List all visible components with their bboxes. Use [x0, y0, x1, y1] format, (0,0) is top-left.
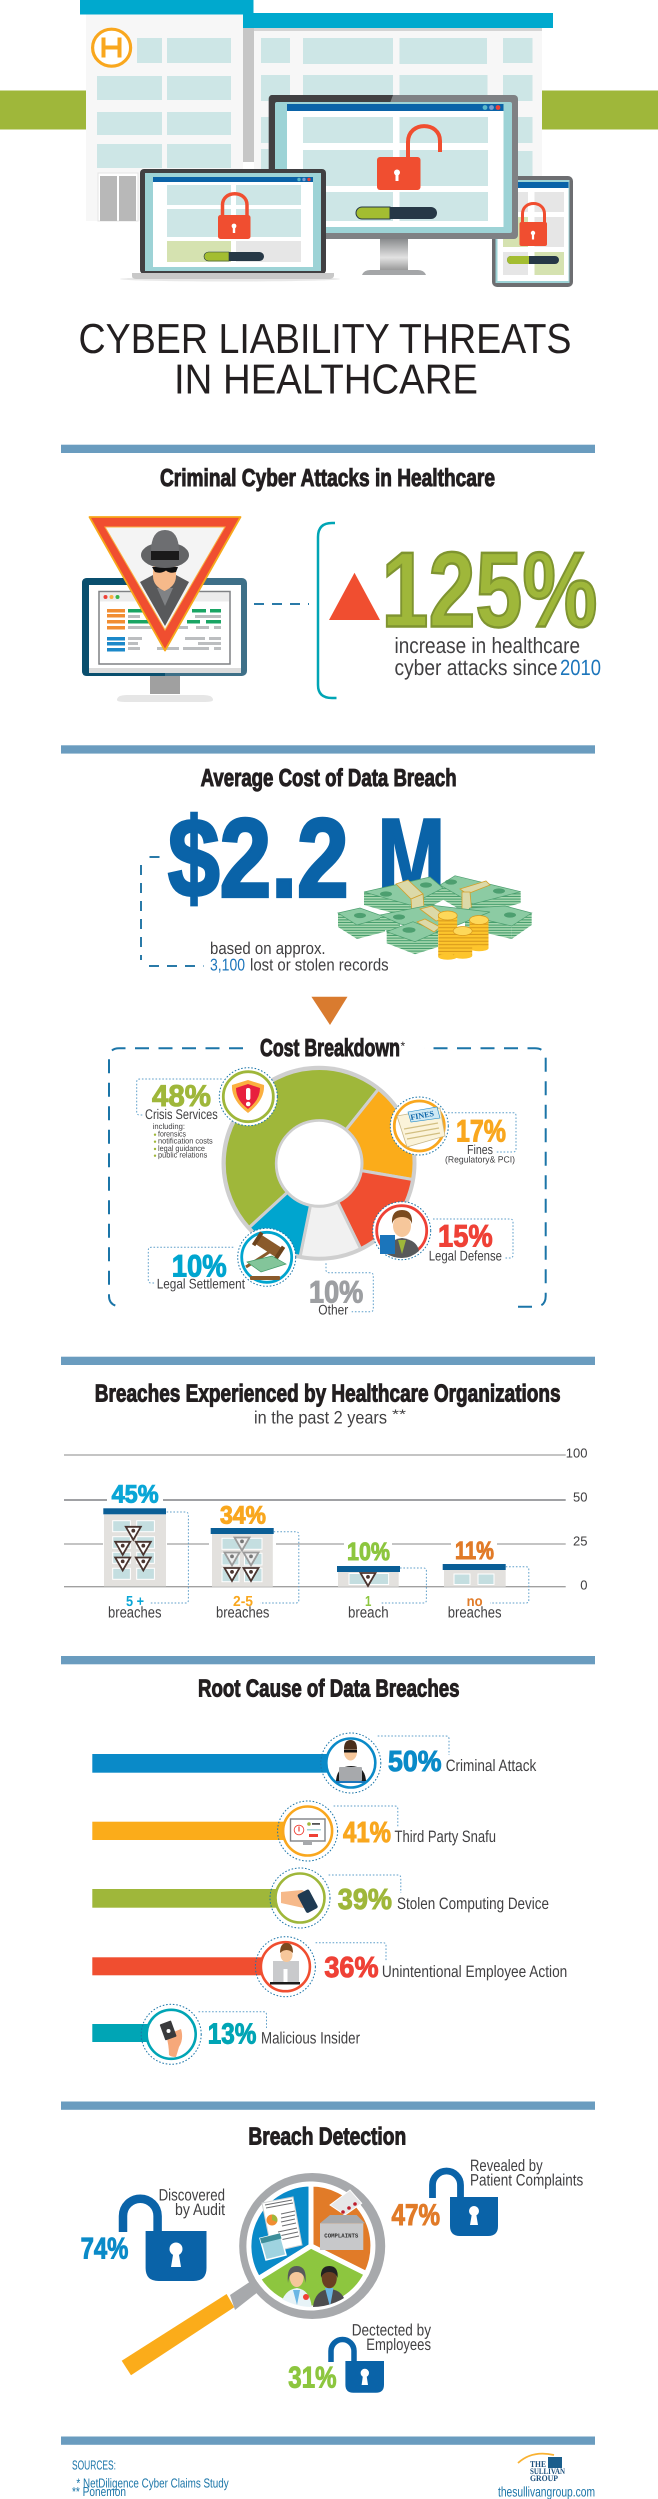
- panel: breaches experienced: [64, 1381, 588, 1621]
- row: criminal attack: [92, 1733, 537, 1793]
- icon: open padlock large: [377, 126, 440, 190]
- dashed bracket: [141, 857, 204, 966]
- caption: 3,100: [210, 956, 245, 975]
- logo: the sullivan group: GROUP: [530, 2473, 558, 2483]
- panel: cost breakdown: [109, 1035, 546, 1317]
- axis labels: 0: [580, 1578, 588, 1592]
- description: cyber attacks since: [394, 655, 558, 680]
- lock: detected by employees: Dectected by: [352, 2322, 432, 2340]
- back left stack: [364, 877, 443, 918]
- callout: other: [309, 1263, 373, 1317]
- callout: crisis services: including:: [153, 1122, 185, 1131]
- bar: 5+ breaches: 5 +: [126, 1594, 144, 1610]
- icon: hacker on monitor: [82, 517, 247, 702]
- callout: legal settlement: 10%: [172, 1249, 227, 1284]
- callout: fines: [390, 1097, 516, 1165]
- bracket: [318, 523, 336, 698]
- callout: crisis services: legal guidance: [158, 1144, 205, 1153]
- section rule: [61, 1357, 595, 1365]
- progress bar: [356, 207, 437, 219]
- heading: Average Cost of Data Breach: [201, 765, 457, 792]
- section rule: [61, 2436, 595, 2445]
- bar chart: [64, 1446, 588, 1621]
- lock: discovered by audit: by Audit: [175, 2201, 225, 2219]
- caption: based on approx.: [210, 939, 326, 958]
- hospital building: [80, 0, 553, 221]
- bar: 1 breach: 1: [365, 1594, 371, 1610]
- bar: 5+ breaches: 45%: [112, 1481, 159, 1509]
- lock: discovered by audit: [81, 2187, 225, 2281]
- logo: the sullivan group: SULLIVAN: [530, 2466, 566, 2476]
- heading: Criminal Cyber Attacks in Healthcare: [160, 465, 495, 492]
- heading: Root Cause of Data Breaches: [198, 1676, 460, 1703]
- left lower stack: [338, 908, 385, 939]
- callout: crisis services: [137, 1068, 277, 1160]
- icon: employee at laptop: [270, 1943, 300, 1984]
- row: criminal attack: 50%: [388, 1746, 442, 1778]
- callout: other: Other: [318, 1301, 349, 1317]
- section rule: [61, 1656, 595, 1664]
- green band left: [0, 90, 86, 130]
- dashed frame: [109, 1048, 546, 1307]
- callout: crisis services: Crisis Services: [145, 1106, 218, 1122]
- caption: lost or stolen records: [250, 956, 389, 975]
- subheading: in the past 2 years: [254, 1407, 387, 1427]
- bar: 2-5 breaches: 2-5: [233, 1594, 253, 1610]
- panel: breach detection: [81, 2123, 583, 2394]
- lock: patient complaints: Revealed by: [470, 2157, 543, 2175]
- lock: patient complaints: 47%: [392, 2199, 440, 2232]
- middle stack: [380, 905, 490, 936]
- bar: no breaches: 11%: [455, 1537, 494, 1565]
- icon: hacker at laptop: [336, 1740, 366, 1783]
- callout: legal defense: Legal Defense: [429, 1248, 502, 1264]
- callout: fines: (Regulatory& PCI): [445, 1155, 515, 1165]
- title: [78, 315, 572, 402]
- laptop: [120, 169, 340, 282]
- icon: hand with device: [281, 1889, 318, 1914]
- icon: closed padlock: [218, 194, 250, 239]
- callout: other: 10%: [309, 1274, 363, 1309]
- audit report: [260, 2197, 302, 2260]
- callout: fines: 17%: [456, 1114, 506, 1149]
- right lower stack: [465, 906, 532, 939]
- stat: $2.2 M: $2.2: [168, 796, 349, 920]
- employees: [282, 2266, 344, 2307]
- description: increase in healthcare: [394, 633, 580, 658]
- callout: crisis services: 48%: [152, 1080, 211, 1113]
- row: third party snafu: 41%: [343, 1817, 391, 1849]
- description: [394, 633, 601, 680]
- panel: average cost of data breach: [141, 765, 532, 1025]
- bar: 5+ breaches: [103, 1481, 188, 1621]
- callout: fines: Fines: [467, 1142, 493, 1157]
- row: malicious insider: 13%: [208, 2018, 257, 2050]
- row: unintentional employee action: Unintentional Employee Action: [382, 1963, 567, 1981]
- sources: SOURCES:: [72, 2457, 116, 2472]
- axis labels: 25: [573, 1534, 588, 1548]
- panel: root cause of data breaches: [92, 1676, 567, 2064]
- gridlines: [64, 1455, 566, 1587]
- row: unintentional employee action: [92, 1937, 567, 1997]
- bar: no breaches: [443, 1537, 529, 1621]
- dashed connector: [254, 603, 309, 605]
- axis labels: 100: [566, 1446, 588, 1460]
- progress bar: [204, 252, 264, 261]
- callout: crisis services: notification costs: [158, 1137, 213, 1146]
- donut chart: [222, 1066, 416, 1261]
- callout: crisis services: forensics: [158, 1130, 186, 1139]
- logo: the sullivan group: THE: [530, 2459, 546, 2469]
- sources: * NetDiligence Cyber Claims Study: [76, 2475, 229, 2490]
- callout: legal defense: [373, 1202, 513, 1264]
- axis labels: 50: [573, 1490, 588, 1504]
- lock: detected by employees: 31%: [288, 2361, 336, 2394]
- logo: the sullivan group: [518, 2454, 566, 2483]
- row: stolen computing device: [92, 1868, 549, 1928]
- bar: 1 breach: [337, 1538, 426, 1621]
- caption: [210, 939, 389, 975]
- lock: patient complaints: [392, 2157, 583, 2236]
- row: malicious insider: Malicious Insider: [261, 2029, 360, 2047]
- callout: legal settlement: Legal Settlement: [157, 1275, 245, 1291]
- row: unintentional employee action: 36%: [324, 1952, 379, 1984]
- heading: *: [400, 1039, 406, 1053]
- hero illustration: [0, 0, 658, 287]
- arrow: down triangle: [311, 997, 348, 1025]
- lock: detected by employees: [288, 2322, 432, 2394]
- lock: discovered by audit: 74%: [81, 2232, 128, 2265]
- coin stacks: [438, 911, 488, 960]
- icon: alert monitor: [290, 1819, 325, 1845]
- subheading: **: [392, 1406, 406, 1422]
- icon: magnifying glass: [122, 2173, 385, 2375]
- desktop monitor: [268, 95, 518, 275]
- lock: discovered by audit: Discovered: [159, 2187, 225, 2205]
- icon: hospital H sign: [93, 29, 131, 66]
- row: stolen computing device: 39%: [338, 1884, 392, 1916]
- front stack: [387, 919, 440, 954]
- section rule: [61, 2102, 595, 2110]
- bar: no breaches: breaches: [448, 1604, 502, 1621]
- green band right: [542, 90, 658, 130]
- section rule: [61, 745, 595, 754]
- complaints box: COMPLAINTS: [324, 2233, 359, 2240]
- tablet: [492, 176, 573, 287]
- description: 2010: [560, 655, 601, 680]
- callout: fines: FINES: [410, 1109, 435, 1122]
- section rule: [61, 445, 595, 453]
- complaints box: [320, 2190, 365, 2250]
- callout: legal defense: 15%: [438, 1219, 493, 1254]
- title: IN HEALTHCARE: [174, 356, 478, 402]
- row: third party snafu: [92, 1801, 496, 1861]
- icon: up triangle: [329, 573, 380, 620]
- bar: no breaches: no: [467, 1594, 483, 1610]
- sources: ** Ponemon: [72, 2484, 126, 2499]
- callout: legal settlement: [148, 1228, 296, 1291]
- back right stack: [440, 876, 521, 917]
- bar: 1 breach: 10%: [347, 1538, 390, 1566]
- lock: detected by employees: Employees: [366, 2336, 431, 2354]
- heading: Breach Detection: [248, 2123, 406, 2150]
- warning triangle: [90, 517, 240, 650]
- axis labels: [566, 1446, 588, 1592]
- sources: [72, 2457, 229, 2499]
- row: malicious insider: [92, 2004, 360, 2064]
- panel: criminal cyber attacks: [82, 465, 601, 702]
- stat: $2.2 M: M: [378, 796, 445, 920]
- bar: 5+ breaches: breaches: [108, 1604, 162, 1621]
- bar: 2-5 breaches: 34%: [220, 1501, 266, 1529]
- row: criminal attack: Criminal Attack: [446, 1757, 537, 1775]
- row: third party snafu: Third Party Snafu: [394, 1828, 496, 1846]
- bar: 2-5 breaches: breaches: [216, 1604, 270, 1621]
- icon: hand with usb drive: [160, 2020, 182, 2057]
- bar: 1 breach: breach: [348, 1604, 389, 1621]
- stat: 125%: 125%: [382, 530, 598, 650]
- icon: tablet padlock: [520, 204, 547, 246]
- title: CYBER LIABILITY THREATS: [78, 315, 572, 362]
- hacker figure: [140, 530, 189, 626]
- row: stolen computing device: Stolen Computing Device: [397, 1895, 549, 1913]
- heading: Cost Breakdown: [260, 1035, 400, 1062]
- callout: crisis services: public relations: [158, 1151, 207, 1160]
- lock: patient complaints: Patient Complaints: [470, 2172, 583, 2190]
- bar: 2-5 breaches: [211, 1501, 299, 1621]
- icon: money and coins: [338, 876, 532, 960]
